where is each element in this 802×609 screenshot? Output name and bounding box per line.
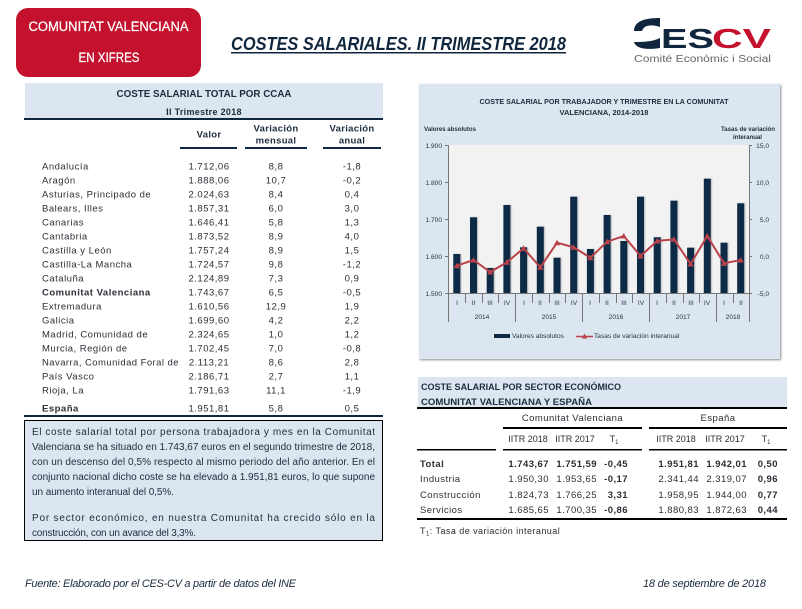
data rows: 1.873,52 (189, 232, 229, 242)
quarter labels: I (656, 300, 658, 307)
text block: summary: con un descenso del 0,5% respecto al mismo periodo del año anterior. En el (32, 457, 375, 468)
axes and category ticks (445, 145, 752, 322)
data rows: 1,3 (345, 218, 359, 228)
data rows (42, 162, 361, 414)
quarter labels: IV (571, 300, 578, 307)
sector rows: 1.950,30 (508, 474, 549, 485)
data rows: 1.646,41 (189, 218, 229, 228)
data rows: 0,9 (345, 274, 359, 284)
sector rows: 1.880,83 (658, 505, 699, 516)
data rows: Asturias, Principado de (42, 190, 151, 200)
right axis labels (756, 143, 769, 298)
line: tasa de variación interanual (454, 233, 744, 274)
column headers: IITR 2018 (656, 434, 696, 444)
data rows: -0,2 (343, 176, 361, 186)
data rows: 5,8 (269, 218, 283, 228)
axis titles: Valores absolutos (424, 126, 476, 133)
group headers (503, 413, 787, 429)
heading: sector: COSTE SALARIAL POR SECTOR ECONÓMICO (421, 381, 621, 393)
quarter labels: II (739, 300, 743, 307)
year labels: 2017 (676, 314, 691, 321)
data rows: 1.888,06 (189, 176, 229, 186)
text block: summary (24, 420, 382, 540)
data rows: 7,3 (269, 274, 283, 284)
data rows: Castilla y León (42, 246, 112, 256)
axis titles: Tasas de variación (721, 126, 775, 133)
sector rows: Construcción (420, 490, 481, 501)
data rows: 1.791,63 (189, 386, 229, 396)
chart title: VALENCIANA, 2014-2018 (560, 108, 648, 117)
text block: summary: El coste salarial total por persona trabajadora y mes en la Comunitat (32, 427, 375, 438)
legend: Tasas de variación interanual (594, 333, 680, 340)
text block: summary: conjunto nacional dicho coste se ha elevado a 1.951,81 euros, lo que supone (32, 472, 375, 483)
quarter labels: III (688, 300, 694, 307)
data rows: Comunitat Valenciana (42, 288, 151, 298)
sector rows: 1.942,01 (706, 459, 747, 470)
axis titles (424, 126, 775, 141)
axis titles: interanual (733, 134, 762, 141)
quarter labels: I (589, 300, 591, 307)
data rows: 2,8 (345, 358, 359, 368)
data rows: 8,8 (269, 162, 283, 172)
column headers: T (762, 434, 767, 444)
left axis labels: 1.600 (425, 254, 442, 261)
group headers: Comunitat Valenciana (522, 413, 623, 424)
year labels (475, 314, 741, 321)
data rows: 2,7 (269, 372, 283, 382)
data rows: 1.702,45 (189, 344, 229, 354)
sector rows: 1.824,73 (508, 490, 549, 501)
column headers: 1 (767, 440, 771, 446)
data rows: Navarra, Comunidad Foral de (42, 358, 179, 368)
sector rows: 1.953,65 (556, 474, 597, 485)
data rows: 2,2 (345, 316, 359, 326)
sector rows: 1.872,63 (706, 505, 747, 516)
data rows: -1,8 (343, 162, 361, 172)
sector rows: 2.341,44 (658, 474, 699, 485)
data rows: España (42, 404, 79, 414)
data rows: -0,5 (343, 288, 361, 298)
left axis labels: 1.500 (425, 291, 442, 298)
data rows: 9,8 (269, 260, 283, 270)
data rows: Murcia, Región de (42, 344, 128, 354)
logo: CES CV (634, 18, 771, 65)
year labels: 2014 (475, 314, 490, 321)
data rows: 1.951,81 (189, 404, 229, 414)
data rows: 2.124,89 (189, 274, 229, 284)
heading: coste salarial total: COSTE SALARIAL TOTAL POR CCAA (116, 89, 292, 100)
footnote: 1 (426, 532, 430, 538)
data rows: 6,5 (269, 288, 283, 298)
right axis labels: 15,0 (756, 143, 769, 150)
data rows: 1.712,06 (189, 162, 229, 172)
data rows: 1.610,56 (189, 302, 229, 312)
data rows: 3,0 (345, 204, 359, 214)
quarter labels: IV (638, 300, 645, 307)
data rows: 2.113,21 (189, 358, 229, 368)
left axis labels (425, 143, 442, 298)
bars: valores absolutos (453, 179, 744, 293)
logo: CES CV: ES (661, 23, 714, 54)
data rows: 6,0 (269, 204, 283, 214)
column headers (417, 434, 787, 450)
sector rows: 1.951,81 (658, 459, 699, 470)
sector rows: 1.685,65 (508, 505, 549, 516)
sector rows: 0,44 (758, 505, 778, 516)
sector rows: 1.751,59 (556, 459, 597, 470)
sector rows: -0,17 (604, 474, 628, 485)
subheading: trimestre: II Trimestre 2018 (166, 107, 242, 117)
column headers: IITR 2017 (705, 434, 745, 444)
data rows: 5,8 (269, 404, 283, 414)
badge: Comunitat Valenciana en xifres: COMUNITAT VALENCIANA (28, 19, 188, 34)
text block: summary: Valenciana se ha situado en 1.743,67 euros en el segundo trimestre de 2018, (32, 442, 375, 453)
heading: sector: COMUNITAT VALENCIANA Y ESPAÑA (421, 397, 592, 408)
logo: CES CV: Comité Econòmic i Social (634, 53, 771, 65)
source note: Fuente: Elaborado por el CES-CV a partir de datos del INE (25, 578, 297, 590)
badge: Comunitat Valenciana en xifres: EN XIFRES (78, 50, 140, 65)
column headers: T (610, 434, 615, 444)
sector rows: 3,31 (608, 490, 628, 501)
panel: coste salarial total por CCAA (24, 83, 383, 417)
sector rows: -0,86 (604, 505, 628, 516)
quarter labels: I (456, 300, 458, 307)
data rows: Cataluña (42, 274, 84, 284)
chart title (480, 97, 729, 117)
data rows: Aragón (42, 176, 76, 186)
data rows: 1,5 (345, 246, 359, 256)
data rows: -1,9 (343, 386, 361, 396)
quarter labels: I (523, 300, 525, 307)
data rows: 2.186,71 (189, 372, 229, 382)
data rows: 1,1 (345, 372, 359, 382)
text block: summary: construcción, con un avance del 3,3%. (32, 528, 196, 539)
column headers: 1 (615, 440, 619, 446)
footnote: T (420, 526, 426, 536)
column headers: Variación (330, 124, 374, 134)
sector rows: 1.944,00 (706, 490, 747, 501)
footnote: : Tasa de variación interanual (430, 526, 560, 536)
data rows: Extremadura (42, 302, 102, 312)
sector rows: Industria (420, 474, 461, 485)
date: 18 de septiembre de 2018 (643, 578, 767, 590)
data rows: 1.757,24 (189, 246, 229, 256)
data rows: 1,9 (345, 302, 359, 312)
data rows: 4,2 (269, 316, 283, 326)
data rows: 1,2 (345, 330, 359, 340)
chart title: COSTE SALARIAL POR TRABAJADOR Y TRIMESTRE EN LA COMUNITAT (480, 97, 729, 106)
year labels: 2018 (726, 314, 741, 321)
title: COSTES SALARIALES. II TRIMESTRE 2018 (231, 33, 567, 54)
sector rows: 1.700,35 (556, 505, 597, 516)
sector rows: 2.319,07 (706, 474, 747, 485)
data rows: 1,0 (269, 330, 283, 340)
data rows: 8,9 (269, 246, 283, 256)
badge: Comunitat Valenciana en xifres (16, 8, 201, 77)
column headers: anual (339, 136, 365, 146)
data rows: 7,0 (269, 344, 283, 354)
column headers: Variación (254, 124, 298, 134)
quarter labels: III (487, 300, 493, 307)
legend (494, 333, 680, 340)
data rows: Canarias (42, 218, 84, 228)
data rows: Rioja, La (42, 386, 84, 396)
sector rows: 1.743,67 (508, 459, 549, 470)
data rows: 0,4 (345, 190, 359, 200)
column headers: mensual (256, 136, 296, 146)
right axis labels: 0,0 (760, 254, 769, 261)
right axis labels: -5,0 (758, 291, 769, 298)
quarter labels: IV (704, 300, 711, 307)
data rows: 1.743,67 (189, 288, 229, 298)
sector rows: 1.958,95 (658, 490, 699, 501)
quarter labels: II (672, 300, 676, 307)
data rows: 8,4 (269, 190, 283, 200)
data rows: 8,6 (269, 358, 283, 368)
column headers: IITR 2018 (508, 434, 548, 444)
data rows: 11,1 (266, 386, 286, 396)
data rows: 1.699,60 (189, 316, 229, 326)
data rows: 1.724,57 (189, 260, 229, 270)
sector rows: 1.766,25 (556, 490, 597, 501)
data rows: Cantabria (42, 232, 88, 242)
data rows: Galicia (42, 316, 75, 326)
data rows: -1,2 (343, 260, 361, 270)
data rows: Balears, Illes (42, 204, 103, 214)
quarter labels: II (472, 300, 475, 307)
logo: CES CV: CV (712, 23, 771, 54)
sector rows (420, 459, 778, 516)
data rows: 8,9 (269, 232, 283, 242)
right axis labels: 10,0 (756, 180, 769, 187)
group headers: España (701, 413, 736, 424)
sector rows: -0,45 (604, 459, 628, 470)
left axis labels: 1.700 (425, 217, 442, 224)
text block: summary: Por sector económico, en nuestra Comunitat ha crecido sólo en la (32, 513, 375, 524)
year labels: 2015 (542, 314, 557, 321)
data rows: Castilla-La Mancha (42, 260, 133, 270)
icon: logo C swooshes (634, 18, 660, 49)
column headers (180, 124, 381, 149)
data rows: 4,0 (345, 232, 359, 242)
sector rows: Servicios (420, 505, 463, 516)
quarter labels: II (605, 300, 609, 307)
sector rows: 0,96 (758, 474, 778, 485)
panel: coste salarial por sector económico (417, 377, 787, 538)
data rows: 10,7 (266, 176, 286, 186)
quarter labels: II (538, 300, 542, 307)
sector rows: 0,50 (758, 459, 778, 470)
data rows: 1.857,31 (189, 204, 229, 214)
legend: Valores absolutos (512, 333, 565, 340)
data rows: 2.324,65 (189, 330, 229, 340)
panel: chart coste salarial por trabajador (419, 84, 780, 359)
column headers: IITR 2017 (555, 434, 595, 444)
quarter labels (456, 300, 743, 307)
quarter labels: IV (504, 300, 511, 307)
text block: summary: un aumento interanual del 0,5%. (32, 487, 174, 498)
plot area (448, 145, 749, 293)
column headers: Valor (197, 130, 221, 140)
sector rows: Total (420, 459, 444, 470)
data rows: Madrid, Comunidad de (42, 330, 148, 340)
data rows: 12,9 (266, 302, 286, 312)
heading: sector (421, 381, 621, 408)
data rows: Andalucía (42, 162, 89, 172)
data rows: -0,8 (343, 344, 361, 354)
quarter labels: III (621, 300, 627, 307)
left axis labels: 1.900 (425, 143, 442, 150)
data rows: País Vasco (42, 372, 94, 382)
left axis labels: 1.800 (425, 180, 442, 187)
sector rows: 0,77 (758, 490, 778, 501)
data rows: 0,5 (345, 404, 359, 414)
right axis labels: 5,0 (760, 217, 769, 224)
quarter labels: III (554, 300, 560, 307)
data rows: 2.024,63 (189, 190, 229, 200)
year labels: 2016 (609, 314, 624, 321)
quarter labels: I (723, 300, 725, 307)
